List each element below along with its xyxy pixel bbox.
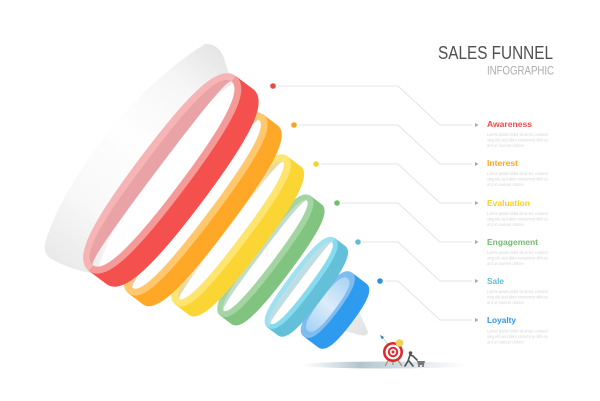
- text block: awareness: oing elit, sed diam nonummy nibh eu: [487, 138, 549, 142]
- text block: loyalty: Lorem ipsum dolor sit amet, consect: [487, 328, 549, 334]
- icon: target with dart and coin: [380, 335, 403, 366]
- text block: evaluation: oing elit, sed diam nonummy nibh eu: [487, 216, 549, 222]
- connector: engagement: [334, 200, 478, 244]
- funnel ring: engagement (green): [211, 189, 332, 332]
- funnel ring: evaluation (yellow): [172, 154, 304, 316]
- text block: evaluation: Lorem ipsum dolor sit amet, consect: [487, 211, 549, 216]
- funnel ring: interest (orange): [124, 112, 282, 306]
- connector: loyalty: [377, 278, 478, 322]
- text block: loyalty: oing elit, sed diam nonummy nibh eu: [487, 334, 549, 339]
- connector: awareness: [270, 83, 478, 127]
- funnel ring: sale (cyan): [260, 233, 354, 342]
- text block: awareness: [487, 119, 549, 148]
- icon: person pushing cart: [405, 351, 425, 367]
- ground shadow: [300, 362, 470, 368]
- text block: engagement: Engagement: [487, 237, 538, 247]
- text block: awareness: Lorem ipsum dolor sit amet, consect: [487, 132, 549, 137]
- text block: evaluation: [487, 198, 549, 227]
- text block: sale: Lorem ipsum dolor sit amet, consect: [487, 289, 549, 294]
- text block: loyalty: [487, 315, 549, 344]
- text block: loyalty: ant ut laoreet dolore: [487, 340, 525, 344]
- text block: evaluation: Evaluation: [487, 198, 530, 208]
- text block: engagement: Lorem ipsum dolor sit amet, consect: [487, 250, 549, 255]
- connector: evaluation: [313, 161, 478, 205]
- text block: interest: oing elit, sed diam nonummy nibh eu: [487, 176, 549, 182]
- text block: engagement: oing elit, sed diam nonummy nibh eu: [487, 256, 549, 260]
- text block: loyalty: Loyalty: [487, 315, 516, 325]
- text block: awareness: Awareness: [487, 119, 532, 129]
- funnel body: translucent grey cone: [45, 44, 368, 336]
- title: SALES FUNNEL: [438, 43, 553, 63]
- text block: sale: [487, 276, 549, 305]
- text block: interest: ant ut laoreet dolore: [487, 182, 525, 187]
- text block: engagement: [487, 237, 549, 266]
- text block: sale: oing elit, sed diam nonummy nibh eu: [487, 294, 549, 300]
- connector: sale: [355, 239, 478, 283]
- text block: interest: Lorem ipsum dolor sit amet, consect: [487, 171, 549, 176]
- text block: interest: [487, 158, 549, 187]
- funnel ring: loyalty (blue): [294, 265, 375, 354]
- text block: interest: Interest: [487, 158, 518, 168]
- text block: awareness: ant ut laoreet dolore: [487, 143, 525, 148]
- text block: evaluation: ant ut laoreet dolore: [487, 222, 525, 227]
- subtitle: INFOGRAPHIC: [487, 66, 554, 78]
- connector: interest: [291, 122, 478, 166]
- text block: sale: ant ut laoreet dolore: [487, 300, 525, 305]
- funnel ring: awareness (red): [71, 63, 273, 299]
- text block: sale: Sale: [487, 276, 504, 286]
- text block: engagement: ant ut laoreet dolore: [487, 261, 525, 266]
